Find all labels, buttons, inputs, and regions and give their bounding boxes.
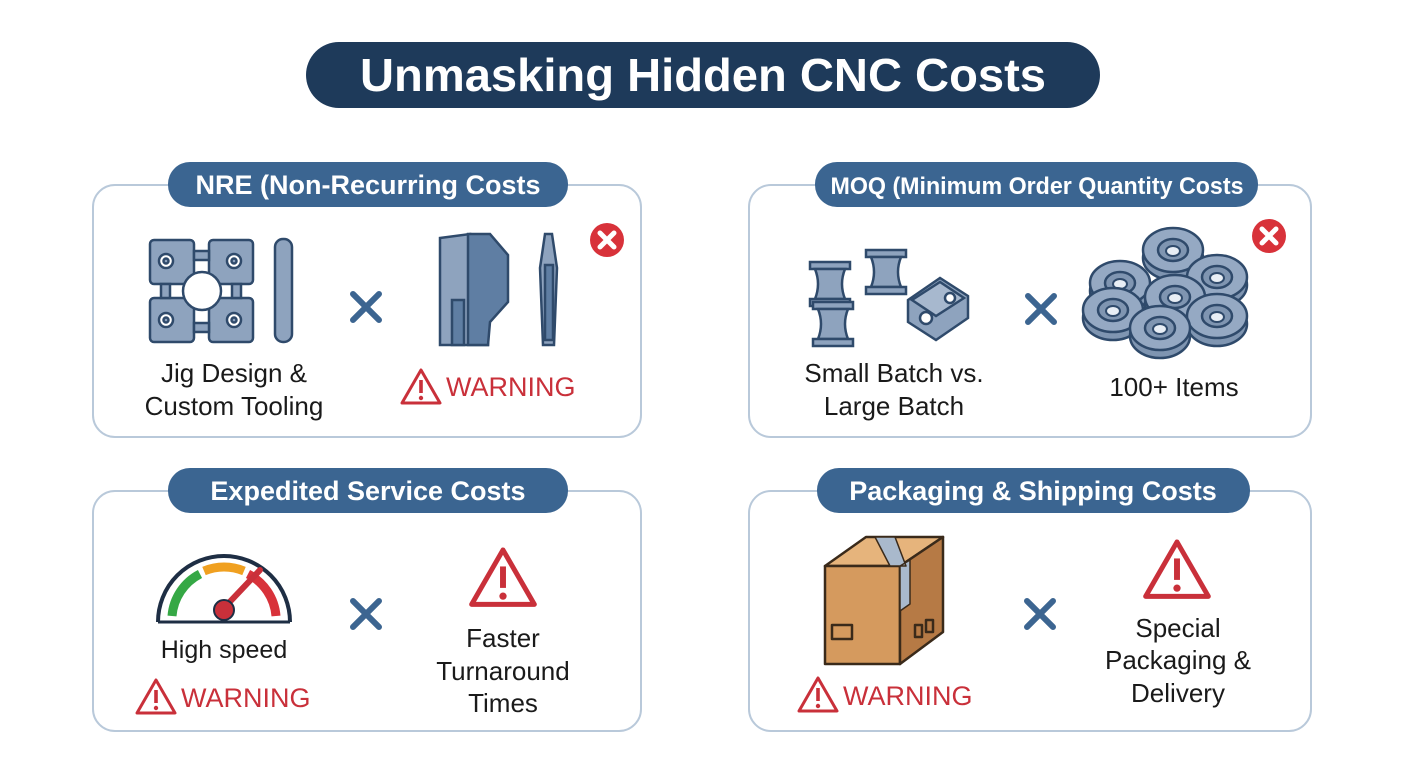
icon: multiply xyxy=(353,601,379,627)
heading: expedited xyxy=(168,468,568,513)
icon: speedometer xyxy=(158,556,290,622)
warning: expedited: WARNING xyxy=(181,683,310,713)
panel: MOQ: Large Batch xyxy=(824,391,964,421)
icon: box xyxy=(825,537,943,664)
panel: NRE xyxy=(93,162,641,437)
icon: warning triangle xyxy=(1146,542,1208,596)
icon: jig xyxy=(150,239,292,342)
panel: expedited xyxy=(93,468,641,731)
icon: multiply xyxy=(353,294,379,320)
icon: warning triangle xyxy=(472,550,534,604)
heading: expedited: Expedited Service Costs xyxy=(210,476,526,506)
heading: NRE xyxy=(168,162,568,207)
title xyxy=(306,42,1100,108)
icon: multiply xyxy=(1028,296,1054,322)
panel: NRE: Custom Tooling xyxy=(145,391,323,421)
panel: packaging xyxy=(749,468,1311,731)
text: items: 100+ Items xyxy=(1109,372,1239,402)
warning: packaging xyxy=(799,678,972,711)
heading: packaging xyxy=(817,468,1250,513)
heading: MOQ xyxy=(815,162,1258,207)
warning: packaging: WARNING xyxy=(843,681,972,711)
text: jig design: Jig Design & xyxy=(161,358,307,388)
text: faster turnaround: Faster xyxy=(466,623,540,653)
heading: MOQ: MOQ (Minimum Order Quantity Costs xyxy=(830,173,1244,200)
icon: red x xyxy=(590,223,624,257)
panel: packaging: Delivery xyxy=(1131,678,1225,708)
icon: red x xyxy=(1252,219,1286,253)
icon: multiply xyxy=(1027,601,1053,627)
text: special packaging: Special xyxy=(1135,613,1221,643)
title: Unmasking Hidden CNC Costs xyxy=(360,49,1046,101)
warning: expedited xyxy=(137,680,310,713)
heading: NRE: NRE (Non-Recurring Costs xyxy=(195,170,541,200)
panel: MOQ xyxy=(749,162,1311,437)
icon: pile of washers xyxy=(1083,228,1247,358)
panel: expedited: Times xyxy=(468,688,538,718)
warning: NRE xyxy=(402,370,576,403)
panel: expedited: Turnaround xyxy=(436,656,570,686)
text: high speed: High speed xyxy=(161,636,287,664)
panel: packaging: Packaging & xyxy=(1105,645,1251,675)
warning: NRE: WARNING xyxy=(446,372,576,402)
text: batch: Small Batch vs. xyxy=(804,358,984,388)
icon: tooling block xyxy=(440,234,557,345)
icon: small batch parts xyxy=(810,250,968,346)
heading: packaging: Packaging & Shipping Costs xyxy=(849,476,1217,506)
